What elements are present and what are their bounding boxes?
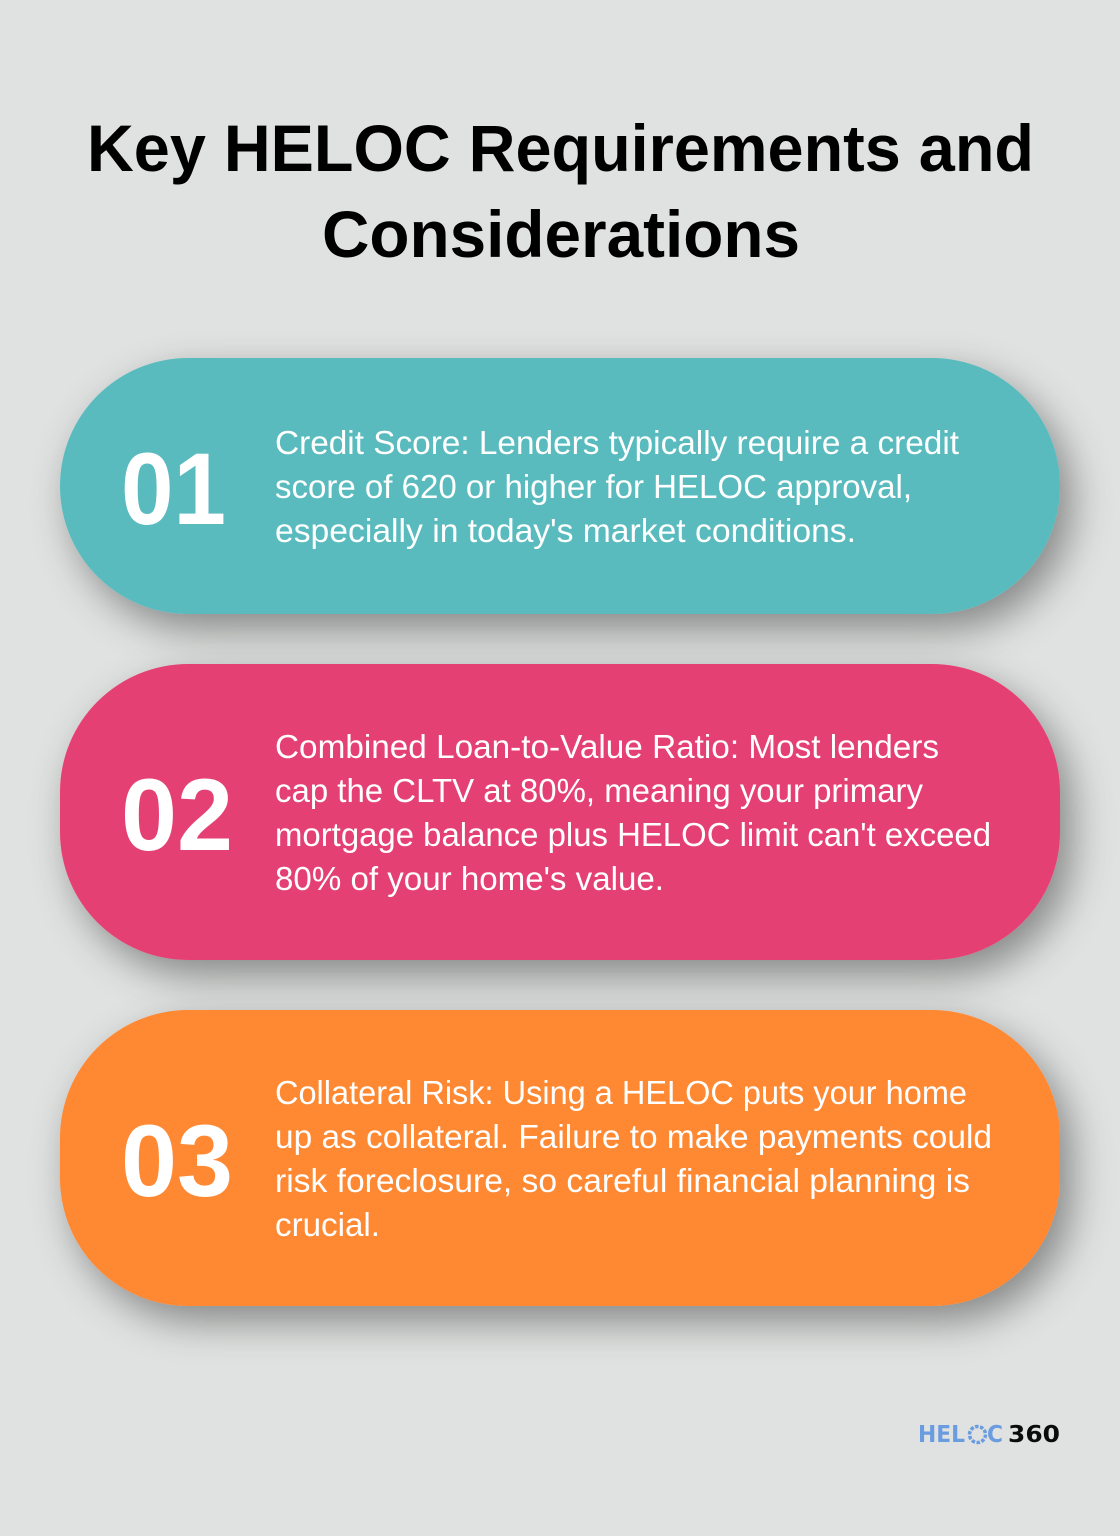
text: collateral risk: up as collateral. Failure to make payments could	[275, 1118, 992, 1155]
title: Key HELOC Requirements and	[87, 111, 1034, 185]
text: credit score: especially in today's market conditions.	[275, 512, 856, 549]
number 01: 01	[121, 432, 226, 546]
text: combined loan-to-value ratio: mortgage balance plus HELOC limit can't exceed	[275, 816, 991, 853]
title: Considerations	[322, 197, 800, 271]
panel background: orange pill	[60, 1010, 1060, 1306]
panel background: teal pill	[60, 358, 1060, 614]
number 02: 02	[121, 758, 233, 872]
icon: swirl letter O	[970, 1426, 986, 1442]
panel: collateral risk	[60, 1010, 1060, 1306]
number 03: 03	[121, 1104, 233, 1218]
logo: HELOC360: C	[987, 1422, 1003, 1448]
text: combined loan-to-value ratio: cap the CLTV at 80%, meaning your primary	[275, 772, 923, 809]
text: combined loan-to-value ratio: Combined Loan-to-Value Ratio: Most lenders	[275, 728, 939, 765]
text: collateral risk: risk foreclosure, so careful financial planning is	[275, 1162, 970, 1199]
title	[87, 111, 1034, 271]
text: combined loan-to-value ratio	[275, 728, 991, 897]
text: credit score: score of 620 or higher for HELOC approval,	[275, 468, 912, 505]
text: credit score	[275, 424, 959, 549]
logo: HELOC360: HEL	[918, 1422, 965, 1448]
logo: HELOC360: 360	[1008, 1422, 1060, 1448]
logo: HELOC360	[918, 1422, 1060, 1448]
text: collateral risk: crucial.	[275, 1206, 380, 1243]
text: collateral risk: Collateral Risk: Using a HELOC puts your home	[275, 1074, 967, 1111]
panel: combined loan-to-value ratio	[60, 664, 1060, 960]
text: credit score: Credit Score: Lenders typically require a credit	[275, 424, 959, 461]
panel: credit score	[60, 358, 1060, 614]
text: combined loan-to-value ratio: 80% of your home's value.	[275, 860, 664, 897]
panel background: pink pill	[60, 664, 1060, 960]
text: collateral risk	[275, 1074, 992, 1243]
